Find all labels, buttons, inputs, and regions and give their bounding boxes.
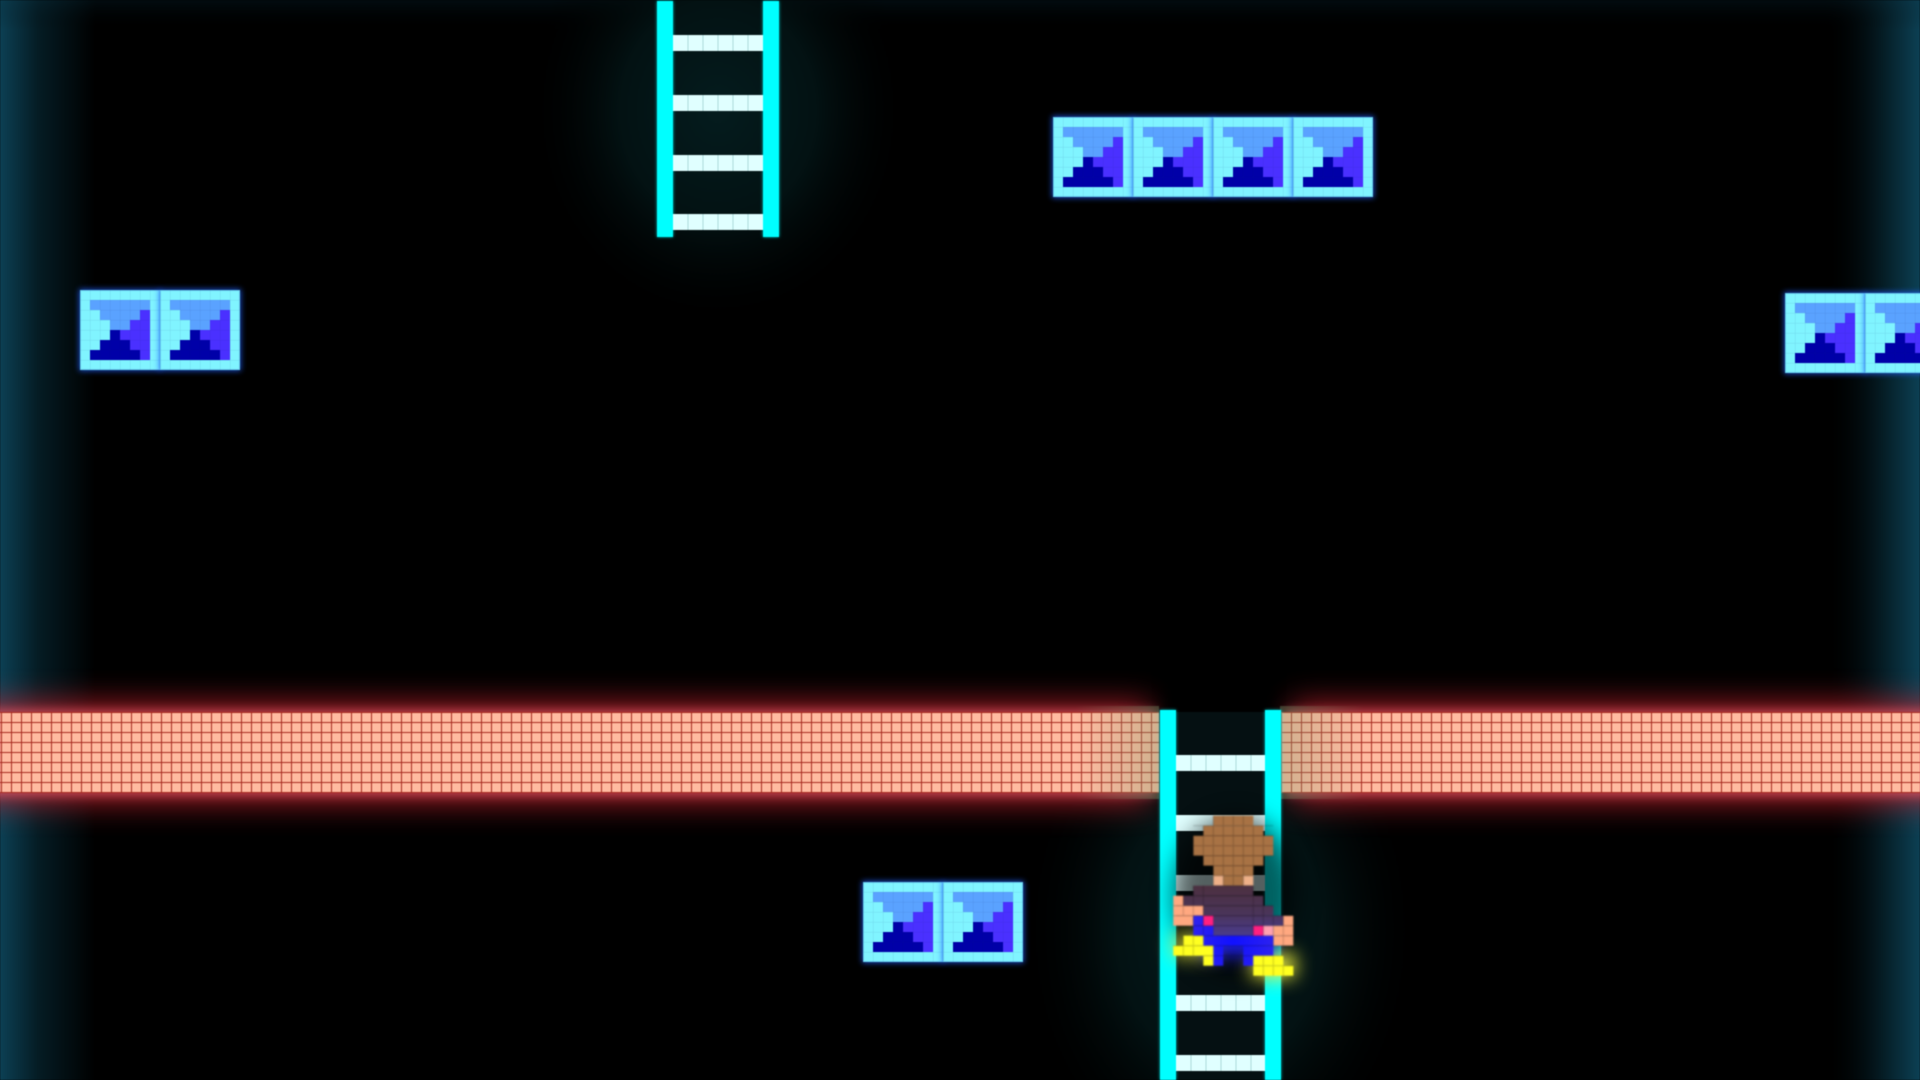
ladder: top (657, 1, 779, 237)
lava inner glow left (0, 710, 1156, 796)
lava outer glow left (0, 704, 1150, 802)
rungs (673, 35, 763, 230)
right rail (763, 1, 779, 237)
neck (1213, 876, 1253, 886)
platform: top centre, four tiles (1052, 116, 1374, 198)
arms (1173, 896, 1293, 946)
top edge vignette (0, 0, 1920, 30)
lava right section (1280, 706, 1920, 799)
lava band (0, 640, 1920, 1080)
platform: left, two tiles (79, 289, 241, 371)
character shadow (1173, 816, 1297, 976)
trousers (1193, 916, 1273, 966)
left rail (1160, 710, 1176, 1080)
hair (1193, 816, 1273, 886)
right edge vignette (1825, 0, 1920, 1080)
lava gap shadow (1168, 640, 1270, 810)
ladder halo: top (523, 0, 913, 330)
character pixel grid (1173, 816, 1293, 976)
left rail (657, 1, 673, 237)
platform: right, cut off by the edge (1784, 292, 1920, 374)
lava outer glow right (1292, 704, 1920, 802)
ladder halo: bottom (1015, 660, 1425, 1080)
lava left section (0, 706, 1159, 799)
pink details (1203, 916, 1273, 936)
character climbing ladder (1173, 816, 1297, 978)
boots (1173, 936, 1293, 976)
character glow (1173, 928, 1295, 978)
character sprite (1173, 816, 1293, 976)
left edge vignette (0, 0, 95, 1080)
right rail (1265, 710, 1281, 1080)
platform: lower centre, two tiles (862, 881, 1024, 963)
ladder: bottom (1160, 710, 1281, 1080)
gap backing (1176, 712, 1265, 1080)
lava inner glow right (1286, 710, 1920, 796)
shirt (1183, 886, 1283, 936)
rungs (1176, 755, 1265, 1071)
